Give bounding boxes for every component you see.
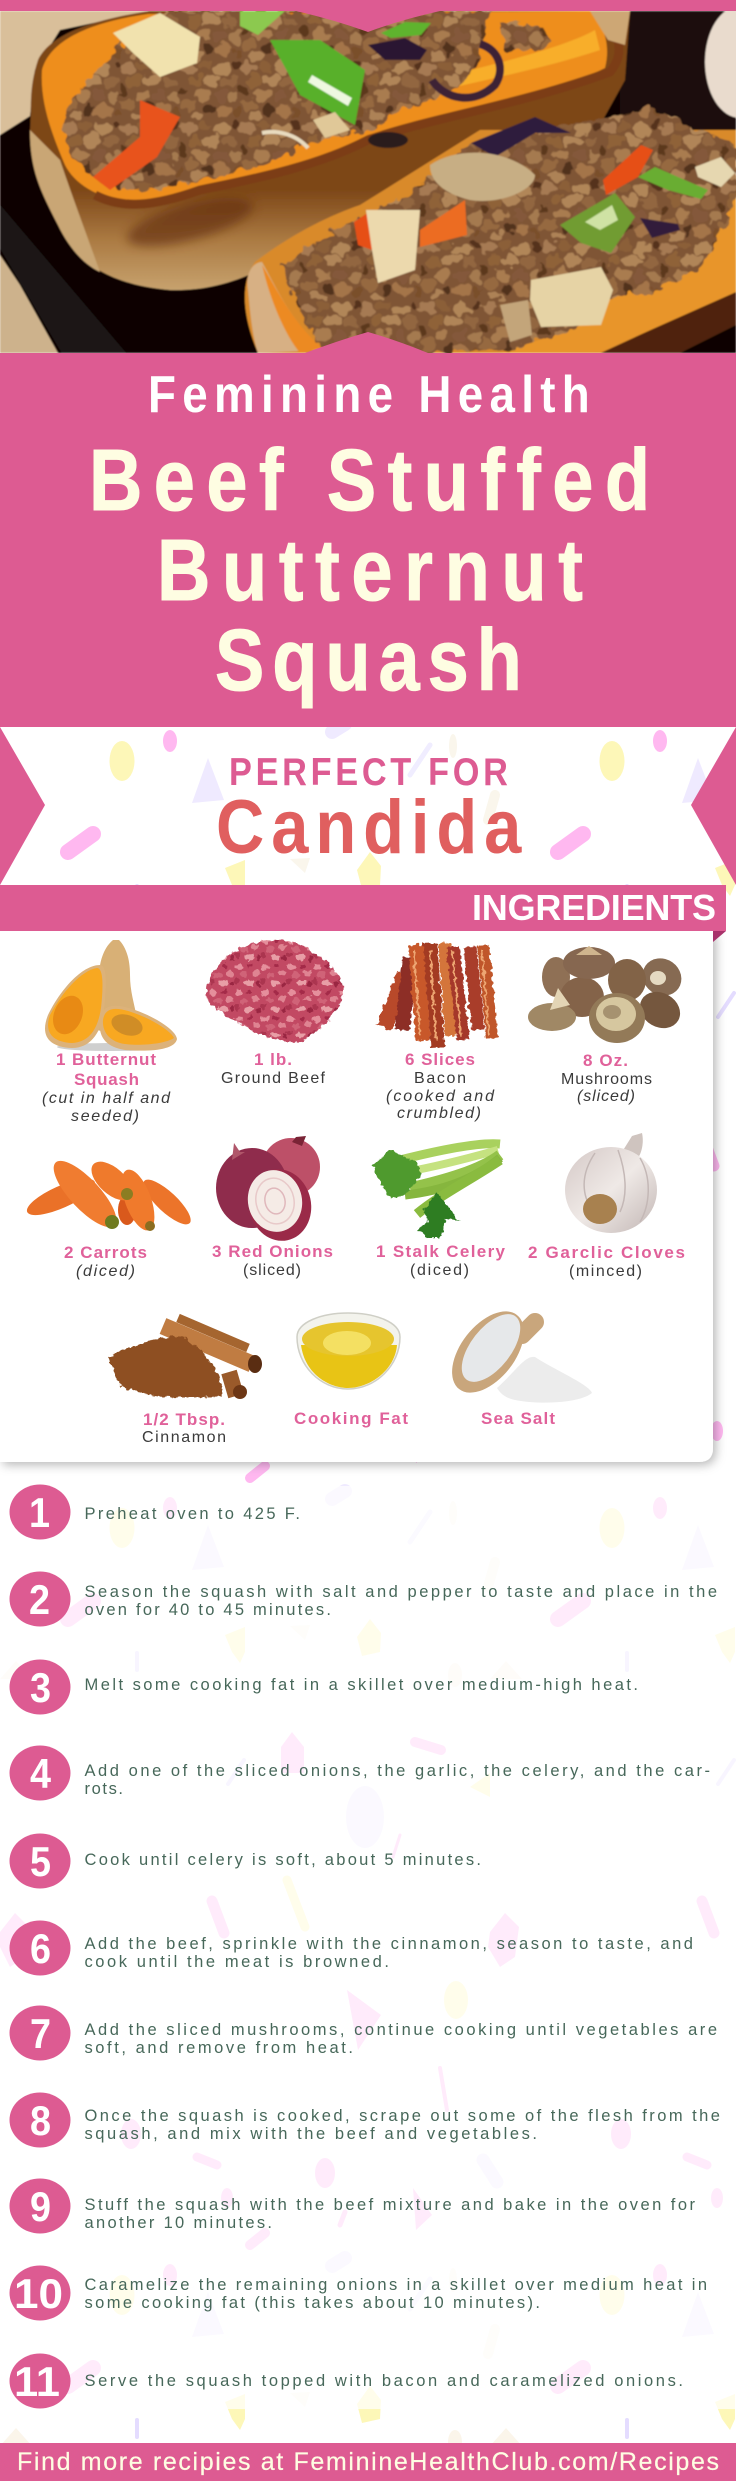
icon: ground beef	[206, 940, 343, 1042]
step 9	[10, 2178, 696, 2234]
label: red onions	[212, 1242, 333, 1279]
label: ground beef	[221, 1050, 326, 1087]
step 2: 2	[29, 1576, 50, 1623]
label: red onions: 3 Red Onions	[212, 1242, 333, 1261]
step 7: soft, and remove from heat.	[84, 2039, 353, 2057]
text: perfect for: PERFECT FOR	[229, 750, 508, 793]
label: cooking fat: Cooking Fat	[294, 1409, 408, 1428]
label: bacon: (cooked and	[386, 1088, 495, 1105]
label: butternut squash: seeded)	[71, 1108, 139, 1125]
step 6: Add the beef, sprinkle with the cinnamon, season to taste, and	[84, 1935, 693, 1953]
step 6: 6	[30, 1925, 51, 1972]
label: bacon: crumbled)	[397, 1105, 481, 1122]
heading: Squash: Squash	[215, 612, 522, 709]
hero photo: stuffed butternut squash	[0, 6, 736, 353]
ingredients header band	[0, 885, 726, 942]
step 10: 10	[14, 2270, 63, 2317]
step 2: Season the squash with salt and pepper to taste and place in the	[84, 1583, 717, 1601]
step 7: Add the sliced mushrooms, continue cooking until vegetables are	[84, 2021, 717, 2039]
label: celery: 1 Stalk Celery	[376, 1242, 506, 1261]
label: cinnamon: Cinnamon	[142, 1429, 226, 1446]
step 4: 4	[30, 1750, 52, 1797]
step 3: Melt some cooking fat in a skillet over medium-high heat.	[84, 1676, 638, 1694]
label: celery	[376, 1242, 506, 1279]
icon: cinnamon	[108, 1318, 262, 1399]
label: garlic: (minced)	[569, 1263, 642, 1280]
step 3: 3	[30, 1664, 51, 1711]
step 8	[10, 2092, 720, 2148]
step 7: 7	[30, 2010, 51, 2057]
label: bacon: Bacon	[414, 1070, 466, 1087]
label: garlic: 2 Garclic Cloves	[528, 1243, 685, 1262]
heading: Beef Stuffed: Beef Stuffed	[89, 432, 650, 529]
icon: bacon	[384, 943, 492, 1047]
label: red onions: (sliced)	[243, 1262, 301, 1279]
ingredients header band: INGREDIENTS	[472, 887, 716, 928]
step 1: 1	[29, 1489, 50, 1536]
label: ground beef: Ground Beef	[221, 1070, 326, 1087]
label: butternut squash: Squash	[74, 1070, 139, 1089]
label: butternut squash: 1 Butternut	[56, 1050, 156, 1069]
step 11: Serve the squash topped with bacon and caramelized onions.	[84, 2372, 683, 2390]
step 10: Caramelize the remaining onions in a skillet over medium heat in	[84, 2276, 707, 2294]
icon: red onions	[216, 1136, 320, 1247]
icon: mushrooms	[528, 946, 689, 1043]
step 6	[10, 1920, 693, 1976]
step 2: oven for 40 to 45 minutes.	[84, 1601, 331, 1619]
step 9: Stuff the squash with the beef mixture and bake in the oven for	[84, 2196, 696, 2214]
label: celery: (diced)	[410, 1262, 469, 1279]
label: mushrooms: 8 Oz.	[583, 1051, 628, 1070]
label: ground beef: 1 lb.	[254, 1050, 292, 1069]
step 1: Preheat oven to 425 F.	[84, 1505, 300, 1523]
panel: perfect for candida ribbon	[0, 727, 736, 885]
step 10	[10, 2266, 707, 2320]
panel: ingredients card	[0, 885, 726, 1462]
step 9: another 10 minutes.	[84, 2214, 272, 2232]
heading: Butternut: Butternut	[157, 522, 583, 619]
label: butternut squash: (cut in half and	[42, 1090, 171, 1107]
label: cinnamon	[142, 1410, 226, 1446]
step 3	[10, 1660, 638, 1714]
step 6: cook until the meat is browned.	[84, 1953, 389, 1971]
step 5	[10, 1834, 481, 1888]
label: mushrooms	[561, 1051, 652, 1105]
icon: cooking oil bowl	[297, 1313, 400, 1389]
icon: garlic	[565, 1133, 657, 1233]
footer band: Find more recipies at FeminineHealthClub.com/Recipes	[17, 2448, 719, 2476]
label: cinnamon: 1/2 Tbsp.	[143, 1410, 225, 1429]
label: bacon: 6 Slices	[405, 1050, 475, 1069]
panel: title block	[0, 332, 736, 727]
step 8: 8	[30, 2097, 51, 2144]
step 5: Cook until celery is soft, about 5 minutes.	[84, 1851, 481, 1869]
step 4: rots.	[84, 1780, 123, 1798]
icon: celery	[373, 1144, 500, 1238]
label: mushrooms: Mushrooms	[561, 1071, 652, 1088]
label: sea salt: Sea Salt	[481, 1409, 555, 1428]
step 4	[10, 1746, 710, 1800]
heading: Feminine Health: Feminine Health	[148, 366, 590, 424]
step 8: squash, and mix with the beef and vegetables.	[84, 2125, 537, 2143]
label: mushrooms: (sliced)	[577, 1088, 635, 1105]
step 9: 9	[30, 2183, 51, 2230]
label: carrots	[64, 1243, 147, 1280]
step 11	[10, 2354, 683, 2408]
step 11: 11	[14, 2358, 60, 2405]
step 10: some cooking fat (this takes about 10 minutes).	[84, 2294, 540, 2312]
label: carrots: 2 Carrots	[64, 1243, 147, 1262]
label: garlic	[528, 1243, 685, 1280]
text: candida: Candida	[216, 785, 522, 870]
label: carrots: (diced)	[76, 1263, 135, 1280]
photo top notch	[296, 11, 440, 32]
label: bacon	[386, 1050, 495, 1122]
step 4: Add one of the sliced onions, the garlic, the celery, and the car-	[84, 1762, 710, 1780]
icon: butternut squash	[45, 940, 177, 1051]
top pink band	[0, 0, 736, 11]
step 1	[10, 1484, 300, 1540]
label: butternut squash	[42, 1050, 171, 1125]
step 8: Once the squash is cooked, scrape out some of the flesh from the	[84, 2107, 720, 2125]
icon: sea salt scoop	[438, 1298, 592, 1406]
background confetti pattern	[0, 724, 736, 2454]
icon: carrots	[23, 1152, 196, 1236]
step 2	[10, 1572, 717, 1626]
step 5: 5	[30, 1838, 51, 1885]
step 7	[10, 2006, 717, 2060]
